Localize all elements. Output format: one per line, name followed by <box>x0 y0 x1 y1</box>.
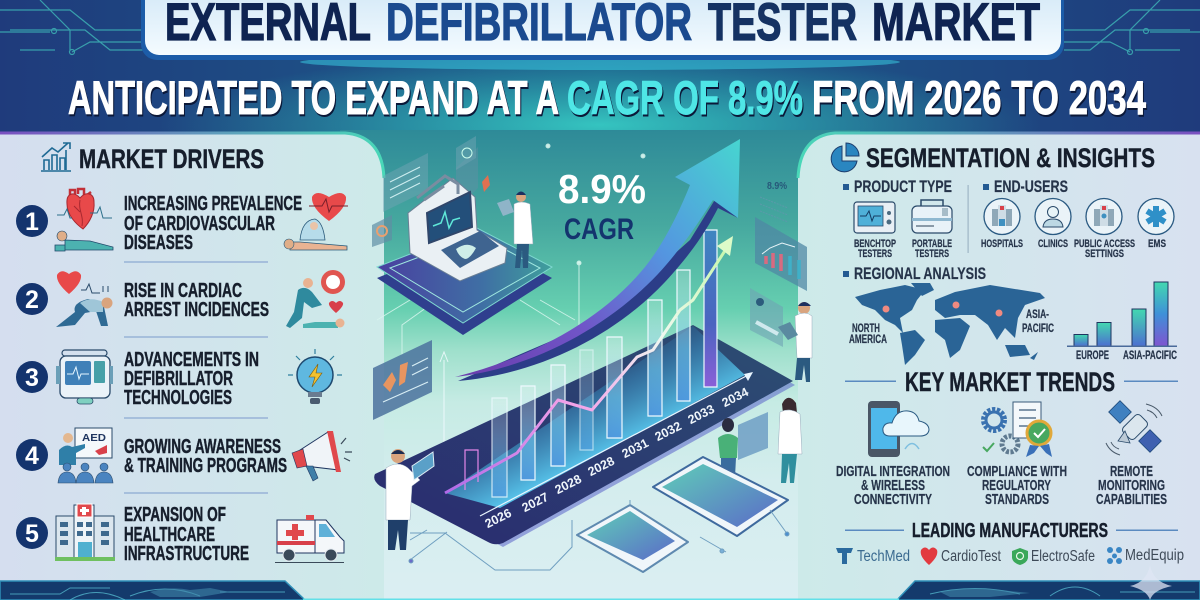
text: driver 4 <box>124 436 287 477</box>
icon: market drivers chart <box>41 143 71 171</box>
divider 1 <box>124 261 268 263</box>
divider 3 <box>124 417 268 419</box>
logo: CardioTest <box>921 548 1002 565</box>
label: digital integration <box>836 464 950 508</box>
label: asia-pacific map: ASIA- <box>1026 309 1049 321</box>
label: asia-pacific map <box>1022 309 1054 335</box>
heading: end-users <box>983 177 1068 196</box>
heading: product type: PRODUCT TYPE <box>854 177 952 196</box>
label: compliance <box>967 464 1067 508</box>
number 2 <box>16 283 48 315</box>
label: public access settings <box>1074 238 1135 260</box>
label: digital integration: CONNECTIVITY <box>854 492 932 508</box>
isometric platform <box>377 228 552 335</box>
floating panel: right chart <box>755 217 807 291</box>
icon: satellite <box>1106 401 1162 455</box>
label: benchtop testers: TESTERS <box>858 248 892 260</box>
text: driver 1: DISEASES <box>124 232 193 254</box>
text: driver 3 <box>124 349 259 409</box>
label: portable testers: PORTABLE <box>912 238 952 250</box>
number 5 <box>16 517 48 549</box>
timeline axis and years: 2033 <box>686 402 717 427</box>
heading: leading manufacturers: LEADING MANUFACTURERS <box>912 520 1108 542</box>
icon: heart and patient <box>55 189 113 251</box>
header background <box>0 0 1200 197</box>
icon: portable tester <box>912 200 952 233</box>
circuit decoration right <box>1064 0 1200 54</box>
icon: clinics <box>1035 198 1071 234</box>
logo: MedEquip: MedEquip <box>1125 547 1184 564</box>
text: driver 5: EXPANSION OF <box>124 504 226 526</box>
footer left <box>0 581 305 600</box>
centre illustration <box>372 136 812 572</box>
icon: collapsing patient <box>56 271 112 327</box>
panel: segmentation background <box>798 133 1200 600</box>
number 3 <box>16 361 48 393</box>
icon: hospitals <box>984 198 1020 234</box>
floating chart label <box>760 181 788 222</box>
segmentation top edge <box>798 133 1200 178</box>
logo: TechMed: TechMed <box>857 548 910 565</box>
label: clinics: CLINICS <box>1038 238 1068 250</box>
label: compliance: STANDARDS <box>985 492 1049 508</box>
icon: public access settings <box>1086 198 1122 234</box>
CAGR label: CAGR <box>564 213 634 246</box>
icon: phone and cloud <box>868 401 929 457</box>
defibrillator tester device <box>408 176 507 281</box>
driver 1 <box>16 189 348 254</box>
growth line <box>445 236 733 493</box>
timeline axis and years: 2028 <box>586 454 617 479</box>
subtitle: ANTICIPATED TO EXPAND AT A <box>68 71 559 124</box>
label: north america: NORTH <box>852 323 880 335</box>
logo: ElectroSafe: ElectroSafe <box>1031 548 1095 565</box>
doctor with laptop <box>386 449 434 550</box>
doctor right with tablet <box>778 302 812 382</box>
label: remote monitoring: REMOTE <box>1110 464 1153 480</box>
timeline axis and years: 2026 <box>483 506 514 531</box>
text: driver 5: HEALTHCARE <box>124 524 215 546</box>
heading: regional analysis: REGIONAL ANALYSIS <box>854 264 986 283</box>
logo: ElectroSafe <box>1012 548 1095 565</box>
icon: megaphone <box>292 431 352 481</box>
text: driver 5: INFRASTRUCTURE <box>124 543 249 565</box>
driver 3 <box>16 349 342 409</box>
number 2: 2 <box>25 286 39 314</box>
regional bar chart: EUROPE <box>1076 350 1109 362</box>
timeline axis and years: 2034 <box>720 385 751 410</box>
driver 2 <box>16 270 345 328</box>
number 5: 5 <box>25 520 39 548</box>
column divider <box>968 185 969 253</box>
timeline axis and years: 2032 <box>653 419 684 444</box>
text: driver 4: & TRAINING PROGRAMS <box>124 455 287 477</box>
label: portable testers: TESTERS <box>915 248 949 260</box>
market drivers top edge <box>0 133 384 178</box>
divider 2 <box>124 336 268 338</box>
label: north america: AMERICA <box>849 334 887 346</box>
watermark star <box>1130 565 1172 600</box>
icon: heart and chest compressions <box>284 193 348 250</box>
floating panel: right small <box>750 288 783 347</box>
isometric timeline board <box>374 325 795 547</box>
icon: AED training <box>58 428 113 483</box>
section: product type <box>843 177 952 260</box>
icon: light bulb <box>288 349 342 404</box>
label: compliance: REGULATORY <box>982 478 1051 494</box>
text: driver 2: RISE IN CARDIAC <box>124 280 242 302</box>
text: driver 5 <box>124 504 249 565</box>
label: remote monitoring <box>1096 464 1167 508</box>
heading: key market trends: KEY MARKET TRENDS <box>905 367 1115 397</box>
woman in green on tablet <box>718 418 738 496</box>
section: key market trends <box>836 367 1178 508</box>
number 1: 1 <box>25 208 39 236</box>
floating chart label: 8.9% <box>767 181 787 192</box>
label: compliance: COMPLIANCE WITH <box>967 464 1067 480</box>
label: asia-pacific map: PACIFIC <box>1022 323 1054 335</box>
label: benchtop testers <box>854 238 896 260</box>
doctor with clipboard <box>738 398 802 483</box>
floating panel: top left <box>372 136 490 247</box>
footer right <box>897 581 1200 600</box>
text: driver 3: ADVANCEMENTS IN <box>124 349 259 371</box>
heading: end-users: END-USERS <box>994 177 1068 196</box>
label: remote monitoring: CAPABILITIES <box>1096 492 1167 508</box>
label: hospitals: HOSPITALS <box>981 238 1023 250</box>
centre background <box>340 130 860 600</box>
8.9% label: 8.9% <box>558 166 646 212</box>
title banner <box>141 0 1064 60</box>
icon: pie chart <box>831 143 859 172</box>
text: driver 2 <box>124 280 269 321</box>
icon: CPR rescue <box>286 270 345 328</box>
panel: segmentation and insights <box>831 143 1184 565</box>
panel: market drivers background <box>0 133 384 600</box>
timeline axis and years: 2031 <box>620 436 651 461</box>
number 4: 4 <box>25 442 39 470</box>
label: public access settings: SETTINGS <box>1085 248 1124 260</box>
timeline axis and years: 2027 <box>520 490 551 515</box>
icon: ambulance <box>275 515 344 563</box>
bar chart <box>465 230 717 497</box>
text: driver 1 <box>124 193 302 254</box>
label: remote monitoring: MONITORING <box>1098 478 1165 494</box>
icon: EMS <box>1138 198 1174 234</box>
label: portable testers <box>912 238 952 260</box>
regional bar chart <box>1067 282 1177 362</box>
text: driver 2: ARREST INCIDENCES <box>124 299 269 321</box>
logo: MedEquip <box>1107 547 1184 564</box>
section: end-users <box>981 177 1174 260</box>
regional bar chart: ASIA-PACIFIC <box>1123 350 1177 362</box>
label: digital integration: DIGITAL INTEGRATION <box>836 464 950 480</box>
floating panel: left <box>373 340 432 420</box>
number 3: 3 <box>25 364 39 392</box>
icon: hospital <box>55 504 115 561</box>
driver 4 <box>16 428 352 483</box>
timeline axis and years: 2028 <box>553 472 584 497</box>
subtitle: CAGR OF 8.9% <box>567 71 803 124</box>
text: driver 1: OF CARDIOVASCULAR <box>124 213 275 235</box>
icon: defibrillator <box>56 350 113 404</box>
circuit decoration left <box>0 0 143 54</box>
label: benchtop testers: BENCHTOP <box>854 238 896 250</box>
world map <box>855 283 1045 365</box>
panel: market drivers <box>16 143 352 565</box>
heading: regional analysis <box>843 264 986 283</box>
icon: gears and certificate <box>983 402 1052 457</box>
text: driver 1: INCREASING PREVALENCE <box>124 193 302 215</box>
section: regional analysis <box>843 264 1177 365</box>
footer centre line <box>303 598 899 600</box>
label: EMS: EMS <box>1148 238 1166 250</box>
glowing dots and guide lines <box>377 144 645 490</box>
tablet small <box>577 505 688 572</box>
text: driver 3: DEFIBRILLATOR <box>124 368 233 390</box>
label: digital integration: & WIRELESS <box>861 478 925 494</box>
subtitle <box>68 71 1146 124</box>
section: leading manufacturers <box>836 520 1184 565</box>
divider 4 <box>124 492 268 494</box>
timeline axis and years <box>480 372 753 531</box>
text: driver 4: GROWING AWARENESS <box>124 436 281 458</box>
text: driver 3: TECHNOLOGIES <box>124 387 232 409</box>
icon: benchtop tester <box>854 202 895 233</box>
number 4 <box>16 439 48 471</box>
logo: TechMed <box>836 548 910 565</box>
icon: AED training: AED <box>82 432 106 444</box>
label: public access settings: PUBLIC ACCESS <box>1074 238 1135 250</box>
driver 5 <box>16 504 344 565</box>
big growth arrow <box>455 139 740 381</box>
number 1 <box>16 205 48 237</box>
logo: CardioTest: CardioTest <box>941 548 1002 565</box>
circuit traces <box>409 500 789 570</box>
label: north america <box>849 323 887 346</box>
heading: market drivers: MARKET DRIVERS <box>79 144 264 174</box>
doctor at device <box>497 192 533 268</box>
tablet large <box>653 457 788 536</box>
